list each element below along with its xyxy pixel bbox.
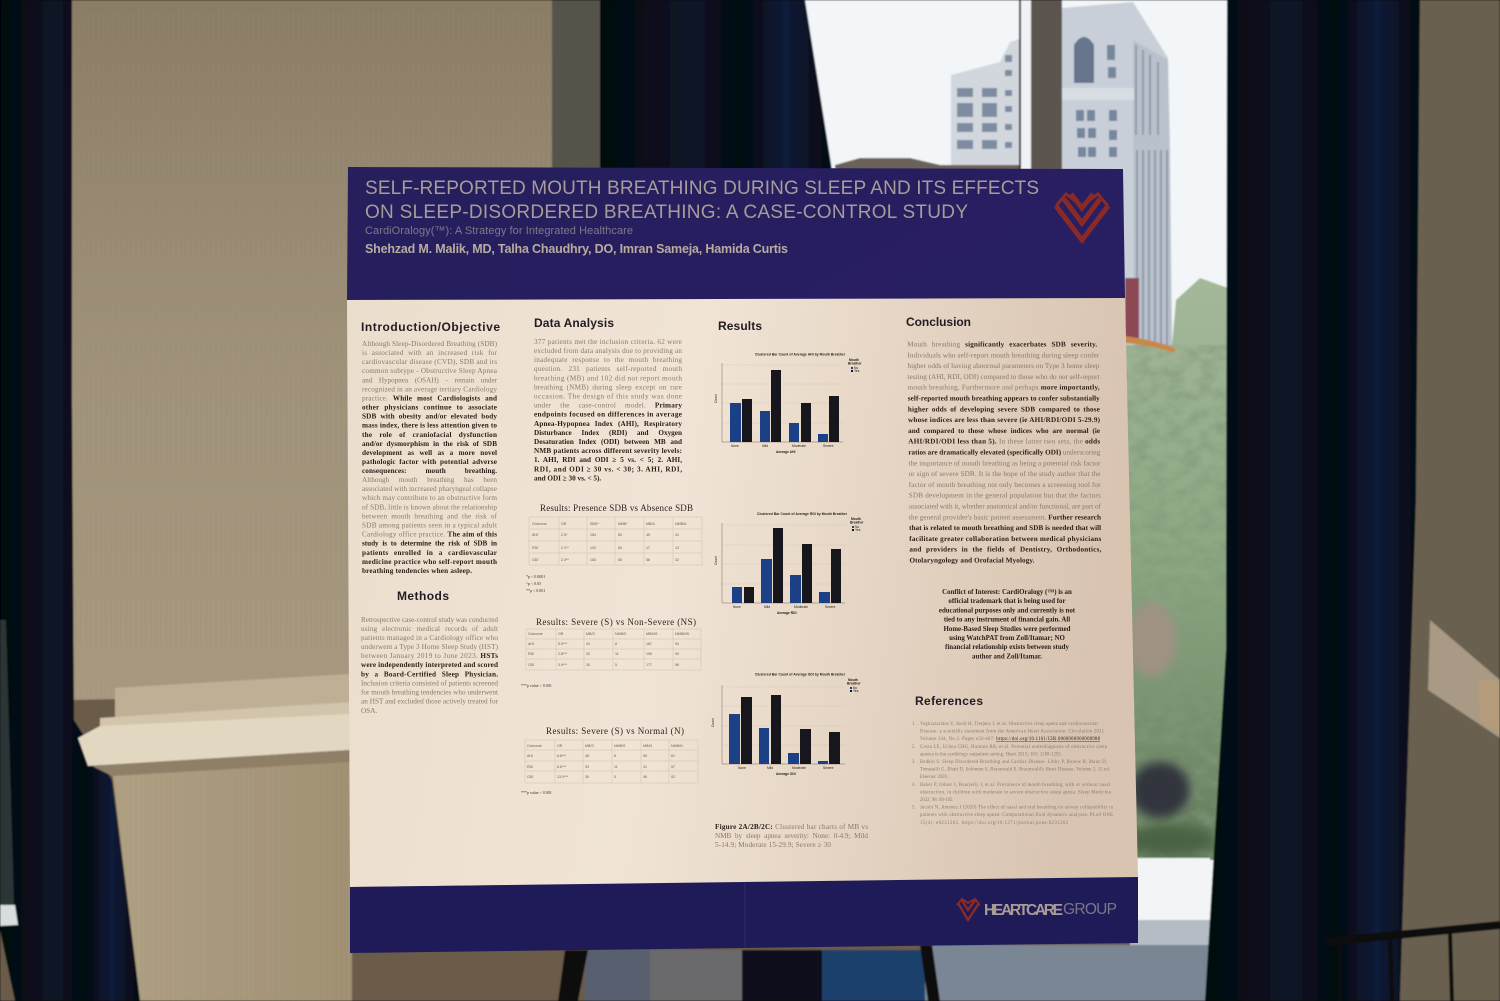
text: data analysis: Desaturation Index (ODI) between MB and	[534, 438, 682, 446]
authors: Shehzad M. Malik, MD, Talha Chaudhry, DO, Imran Sameja, Hamida Curtis	[365, 242, 788, 256]
text: conflict of interest: tied to any instrument of financial gain. All	[944, 617, 1070, 624]
window sill and lower wall	[1130, 858, 1210, 922]
table: severe vs non-severe: MB/NS	[646, 632, 658, 636]
heading: Data Analysis: Data Analysis	[534, 316, 614, 330]
table: presence vs absence SDB: OR	[561, 522, 567, 526]
table: severe vs non-severe: 90	[675, 652, 679, 656]
text: conclusion: higher odds of having abnormal parameters on Type 3 home sleep	[907, 362, 1100, 370]
table: severe vs normal: 31	[643, 765, 647, 769]
table: severe vs non-severe	[521, 617, 701, 688]
table: presence vs absence SDB: ^p < 0.05	[526, 581, 541, 586]
text: introduction: Cardiology office practice. The aim of this	[362, 530, 497, 538]
text: conclusion: self-reported mouth breathing appears to confer substantially	[908, 395, 1100, 402]
text: data analysis: 377 patients met the inclusion criteria. 62 were	[534, 338, 682, 346]
table: severe vs non-severe: 30	[586, 663, 590, 667]
right curtain	[1205, 0, 1420, 1001]
text: conflict of interest: educational purposes only and currently is not	[939, 607, 1076, 614]
text: references: 5.	[912, 806, 916, 811]
text: methods: an HST and excluded those actively treated for	[361, 698, 499, 706]
text: references: 4.	[912, 783, 916, 788]
table: presence vs absence SDB: 192	[590, 546, 596, 550]
text: references: Jacobi N, Jimenez J (2020) The effect of nasal and oral breathing on airway collapsibility in	[920, 806, 1114, 811]
figure caption: Figure 2A/2B/2C: Clustered bar charts of MB vs	[715, 823, 868, 831]
table: presence vs absence SDB: NMB/A	[675, 522, 687, 526]
text: introduction: study is to determine the risk of SDB in	[362, 540, 497, 548]
text: conclusion: the general provider's basic patient assessment. Further research	[909, 513, 1101, 521]
chart: AHI clustered bars: Mild	[762, 444, 768, 448]
table: severe vs non-severe: Outcome	[528, 632, 543, 636]
text: introduction: consequences: mouth breathing.	[362, 467, 497, 475]
table: presence vs absence SDB: SBD*	[590, 522, 599, 526]
table: severe vs normal: 8	[614, 754, 616, 758]
chart: AHI clustered bars: Breather	[848, 362, 862, 366]
table: severe vs normal	[521, 726, 698, 795]
chart: AHI clustered bars	[714, 352, 862, 454]
text: conclusion: or sign of severe SDB. It is the hope of the study author that the	[909, 470, 1101, 478]
text: methods: patients managed in a Cardiology office who	[361, 634, 498, 642]
chart: AHI clustered bars: Count	[714, 394, 718, 403]
text: references: Bedkin S. Sleep Disordered Breathing and Cardiac Disease. Libby P, Bonow R, Mann D,	[920, 760, 1107, 765]
table: severe vs non-severe: ***p value < 0.001	[521, 683, 552, 688]
heading: References: References	[915, 694, 983, 708]
text: conclusion	[907, 341, 1102, 564]
table: severe vs normal: AHI	[527, 754, 533, 758]
text: methods: using electronic medical records of adult	[361, 625, 498, 633]
trees	[1124, 278, 1228, 860]
chart: RDI clustered bars: Severe	[825, 605, 836, 609]
chart: RDI clustered bars: Yes	[855, 528, 861, 532]
text: conclusion: and providers in the fields of Dentistry, Orthodontics,	[909, 546, 1102, 554]
under poster: curtain and easel	[585, 950, 650, 1001]
chart: RDI clustered bars: Breather	[850, 520, 864, 524]
text: references: Disease: a scientific statement from the American Heart Association. Circulation 2021	[920, 730, 1105, 735]
figure caption: 5-14.9; Moderate 15-29.9; Severe ≥ 30	[715, 841, 831, 849]
text: introduction	[362, 340, 498, 575]
table: severe vs normal: NMB/N	[671, 744, 683, 748]
table: severe vs normal: OR	[557, 744, 563, 748]
text: introduction: and/or dysmorphism in the risk of SDB	[362, 440, 497, 448]
text: introduction: practice. While most Cardiologists and	[362, 394, 497, 402]
table: presence vs absence SDB: 58	[646, 558, 650, 562]
chart: RDI clustered bars: None	[733, 605, 741, 609]
table: severe vs normal: 57	[671, 765, 675, 769]
text: methods: between January 2019 to June 2023. HSTs	[361, 652, 498, 660]
text: conclusion: Individuals who self-report mouth breathing during sleep confer	[907, 351, 1100, 359]
text: data analysis: under the case-control model. Primary	[534, 402, 682, 410]
table: severe vs normal: NMB/S	[614, 744, 626, 748]
centre curtain	[600, 0, 832, 170]
text: introduction: patients enrolled in a cardiovascular	[362, 549, 498, 557]
text: data analysis: breathing (MB) and 102 did not report mouth	[534, 374, 682, 382]
chair rail moulding	[78, 674, 350, 776]
heading: Results: Results	[718, 319, 762, 333]
table: presence vs absence SDB: 184	[590, 533, 596, 537]
chart: AHI clustered bars: Moderate	[792, 444, 806, 448]
text: references: 3.	[912, 760, 916, 765]
text: data analysis: excluded from data analysis due to providing an	[534, 347, 682, 355]
heading: Methods: Methods	[397, 589, 449, 603]
text: methods: for mouth breathing tendencies who underwent	[361, 688, 498, 696]
table: presence vs absence SDB: *p < 0.0001	[526, 574, 545, 579]
footer banner	[350, 877, 1138, 953]
text: data analysis: NMB patients across different severity levels:	[534, 447, 682, 455]
text: methods	[361, 616, 499, 715]
building: distant block	[835, 38, 1022, 175]
table: severe vs normal: 50	[643, 754, 647, 758]
text: introduction: which may contribute to an obstructive form	[362, 494, 497, 502]
table: presence vs absence SDB: 41	[675, 533, 679, 537]
table: severe vs non-severe: 2.8***	[558, 652, 568, 656]
text: introduction: Although Sleep-Disordered Breathing (SDB)	[362, 340, 498, 348]
table: severe vs non-severe: 177	[646, 663, 652, 667]
table: presence vs absence SDB: 80	[618, 533, 622, 537]
table: severe vs normal: MB/S	[585, 744, 594, 748]
table: presence vs absence SDB: RDI	[532, 546, 538, 550]
chart: ODI clustered bars: Average ODI	[776, 772, 796, 776]
text: conflict of interest: author and Zoll/Itamar.	[972, 653, 1042, 660]
text: data analysis: breathing (NMB) during sleep except on rare	[534, 384, 682, 392]
table: severe vs non-severe: NMB/NS	[675, 632, 690, 636]
chart: ODI clustered bars: No	[853, 686, 857, 690]
text: data analysis: RDI, and ODI ≥ 30 vs. < 30; 3. AHI, RDI,	[534, 466, 682, 474]
text: introduction: development as well as a more novel	[362, 449, 497, 457]
text: conclusion: facilitate greater collaboration between medical physicians	[909, 535, 1101, 543]
heading: Introduction/Objective: Introduction/Objective	[361, 320, 500, 334]
table: severe vs non-severe: MB/S	[586, 632, 595, 636]
chart: RDI clustered bars: Mouth	[851, 517, 861, 521]
table: presence vs absence SDB: 84	[618, 546, 622, 550]
building: main tower	[1062, 2, 1172, 345]
table: severe vs normal: RDI	[527, 765, 533, 769]
table: presence vs absence SDB: MB/A	[646, 522, 655, 526]
table: severe vs normal: ODI	[527, 775, 533, 779]
logo: footer heartcare group: HEARTCARE	[984, 902, 1063, 919]
table: severe vs normal: 48	[585, 754, 589, 758]
table: severe vs normal: 11	[614, 765, 618, 769]
poster body panel	[347, 297, 1138, 887]
chart: AHI clustered bars: Severe	[823, 444, 834, 448]
table: severe vs non-severe: 96	[675, 663, 679, 667]
chart: ODI clustered bars: Mouth	[848, 678, 858, 682]
chart: AHI clustered bars: No	[854, 366, 858, 370]
text: data analysis	[534, 338, 682, 482]
text: conclusion: ratios are dramatically elevated (specifically ODI) underscoring	[908, 449, 1101, 456]
table: severe vs non-severe: NMB/S	[615, 632, 627, 636]
text: data analysis: endpoints focused on differences in average	[534, 410, 682, 418]
table: presence vs absence SDB	[526, 503, 702, 593]
text: references: Costa LE, Uchoa CHG, Harmon RR, et al. Potential underdiagnosis of obstructive sleep	[920, 745, 1108, 750]
table: severe vs non-severe: Results: Severe (S) vs Non-Severe (NS)	[536, 617, 696, 627]
chart: AHI clustered bars: Mouth	[849, 358, 859, 362]
table: severe vs non-severe: ODI	[528, 663, 534, 667]
chair in corner	[1325, 925, 1500, 942]
chart: ODI clustered bars: Clustered Bar Count of Average ODI by Mouth Breather	[755, 672, 846, 676]
table: severe vs normal: 30	[585, 775, 589, 779]
table: severe vs non-severe: 5.9***	[558, 642, 568, 646]
table: severe vs normal: MB/N	[643, 744, 652, 748]
text: references: 1.	[912, 722, 916, 727]
chart: ODI clustered bars: Yes	[853, 689, 859, 693]
chart: RDI clustered bars: No	[855, 525, 859, 529]
text: references	[912, 722, 1114, 826]
chart: RDI clustered bars: Clustered Bar Count of Average RDI by Mouth Breather	[757, 512, 848, 516]
text: methods: were independently interpreted and scored	[361, 661, 498, 669]
chart: AHI clustered bars: Yes	[854, 369, 860, 373]
text: conclusion: that is related to mouth breathing and SDB is needed that will	[909, 524, 1101, 532]
text: introduction: common subtype - Obstructive Sleep Apnea	[362, 367, 498, 375]
table: presence vs absence SDB: 183	[590, 558, 596, 562]
text: data analysis: occasion. The design of this study was done	[534, 392, 682, 400]
left window strip	[0, 620, 14, 905]
poster	[347, 167, 1138, 953]
logo: footer heartcare group	[957, 899, 1117, 920]
table: severe vs non-severe: RDI	[528, 652, 534, 656]
table: presence vs absence SDB: **p < 0.001	[526, 588, 545, 593]
text: introduction: recognized in an average tertiary Cardiology	[362, 386, 497, 394]
header banner	[347, 167, 1125, 300]
table: severe vs normal: 46	[643, 775, 647, 779]
table: presence vs absence SDB: 45	[646, 533, 650, 537]
text: conflict of interest: Conflict of Interest: CardiOralogy (™) is an	[942, 589, 1072, 596]
table: presence vs absence SDB: 17	[646, 546, 650, 550]
text: conclusion: testing (AHI, RDI, ODI) compared to those who do not self-report	[908, 373, 1100, 381]
text: conclusion: mouth breathing. Furthermore and perhaps more importantly,	[908, 384, 1100, 392]
text: references: Elsevier. 2020.	[920, 775, 948, 780]
text: introduction: is associated with an increased risk for	[362, 349, 498, 357]
text: introduction: medicine practice who self-report mouth	[362, 558, 497, 566]
table: severe vs normal: 33	[585, 765, 589, 769]
text: conflict of interest: official trademark that is being used for	[948, 598, 1066, 605]
text: references: Baker P, Oduor J, Bourjeily J, et al. Prevalence of mouth breathing, with or without nasal	[920, 783, 1111, 788]
poster text and charts	[361, 178, 1117, 920]
text: conclusion: Mouth breathing significantly exacerbates SDB severity.	[907, 341, 1097, 348]
chart: ODI clustered bars	[711, 672, 861, 776]
text: introduction: the role of craniofacial dysfunction	[362, 431, 497, 439]
logo: footer heartcare group: GROUP	[1063, 901, 1117, 918]
chart: RDI clustered bars: Count	[714, 556, 718, 565]
text: conclusion: the importance of mouth breathing as being a potential risk factor	[908, 459, 1101, 467]
logo: header heart	[1056, 194, 1108, 240]
left wall	[72, 0, 552, 700]
text: introduction: associated with increased pharyngeal collapse	[362, 485, 497, 493]
text: introduction: pathologic factor with potential adverse	[362, 458, 497, 466]
text: introduction: mass index, there is less attention given to	[362, 422, 497, 430]
table: severe vs normal: 61	[671, 754, 675, 758]
chart: RDI clustered bars	[714, 512, 864, 615]
text: conflict of interest: Home-Based Sleep Studies were performed	[944, 626, 1071, 633]
text: conclusion: and compared to those whose indices who are normal (ie	[908, 427, 1100, 435]
text: conclusion: Otolaryngology and Orofacial Myology.	[909, 557, 1035, 564]
text: conclusion: SDB development in the general population but that the factors	[909, 492, 1101, 500]
text: introduction: breathing tendencies when asleep.	[362, 567, 472, 575]
table: severe vs non-severe: 44	[586, 642, 590, 646]
text: methods: Inclusion criteria consisted of patients screened	[361, 680, 498, 688]
table: severe vs normal: ***p value < 0.001	[521, 790, 552, 795]
text: methods: underwent a Type 3 Home Sleep Study (HST)	[361, 643, 499, 651]
heading: Conclusion: Conclusion	[906, 315, 971, 329]
text: conflict of interest: financial relationship exists between study	[945, 644, 1070, 651]
text: introduction: between mouth breathing and the risk of	[362, 512, 498, 520]
chart: ODI clustered bars: Count	[711, 718, 715, 727]
text: introduction: Although mouth breathing has been	[362, 476, 497, 484]
text: methods: Retrospective case-control study was conducted	[361, 616, 498, 624]
table: severe vs non-severe: 187	[646, 642, 652, 646]
table: severe vs non-severe: 8	[615, 642, 617, 646]
chart: ODI clustered bars: None	[738, 766, 746, 770]
table: severe vs non-severe: 196	[646, 652, 652, 656]
text: references: Tomaselli G, Bhatt D, Solomon S, Braunwald E. Braunwald's Heart Disease. Volume 2, 12 ed.	[920, 768, 1110, 773]
text: data analysis: inadequate response to the mouth breathing	[534, 356, 682, 364]
table: severe vs non-severe: OR	[558, 632, 564, 636]
text: references: Volume 144, No.3. Pages e56-e67. https://doi.org/10.1161/CIR.0000000000000988	[920, 737, 1101, 742]
table: presence vs absence SDB: 2.5*	[561, 533, 568, 537]
table: presence vs absence SDB: AHI	[532, 533, 538, 537]
chart: RDI clustered bars: Average RDI	[777, 611, 797, 615]
text: methods: OSA.	[361, 707, 377, 715]
table: severe vs normal: 6.6***	[557, 765, 567, 769]
text: data analysis: question. 231 patients self-reported mouth	[534, 365, 682, 373]
text: introduction: cardiovascular disease (CVD), SDB and its	[362, 358, 497, 366]
text: references: apnoea in the cardiology outpatient setting. Heart 2015; 101: 1288-1292.	[920, 752, 1062, 757]
table: presence vs absence SDB: NMB*	[618, 522, 628, 526]
table: presence vs absence SDB: 80	[618, 558, 622, 562]
window mullion	[1020, 0, 1032, 170]
figure caption	[715, 823, 868, 849]
chart: AHI clustered bars: None	[731, 444, 739, 448]
table: severe vs non-severe: 3.9***	[558, 663, 568, 667]
title	[365, 178, 1039, 223]
text: data analysis: Apnea-Hypopnea Index (AHI), Respiratory	[534, 420, 682, 428]
text: data analysis: and ODI ≥ 30 vs. < 5).	[534, 474, 601, 482]
table: severe vs normal: Results: Severe (S) vs Normal (N)	[546, 726, 684, 736]
text: introduction: of SDB, little is known about the relationship	[362, 504, 497, 512]
text: references: patients with obstructive sleep apnea: Computational fluid dynamics analyses. PLoS ONE	[920, 813, 1113, 818]
table: severe vs normal: 5	[614, 775, 616, 779]
chart: ODI clustered bars: Mild	[767, 766, 773, 770]
table: presence vs absence SDB: Results: Presence SDB vs Absence SDB	[540, 503, 693, 513]
chart: RDI clustered bars: Moderate	[794, 605, 808, 609]
table: severe vs non-severe: 33	[586, 652, 590, 656]
text: references: 15(4): e0231262. https://doi.org/10.1371/journal.pone.0231262	[920, 821, 1069, 826]
title: SELF-REPORTED MOUTH BREATHING DURING SLEEP AND ITS EFFECTS	[365, 178, 1039, 199]
chart: ODI clustered bars: Severe	[823, 766, 834, 770]
chart: ODI clustered bars: Moderate	[792, 766, 806, 770]
text: references: Yeghiazarians Y, Jneid H, Tietjens J, et al. Obstructive sleep apnea and cardiovascular	[920, 722, 1098, 727]
table: severe vs normal: 13.0***	[557, 775, 569, 779]
figure caption: NMB by sleep apnea severity: None: 0-4.9; Mild	[715, 832, 868, 840]
table: presence vs absence SDB: ODI	[532, 558, 538, 562]
sky through window	[800, 0, 1230, 930]
table: presence vs absence SDB: Outcome	[532, 522, 547, 526]
text: conclusion: whose indices are less than severe (ie AHI/RDI/ODI 5-29.9)	[908, 416, 1101, 424]
table: severe vs non-severe: 5	[615, 663, 617, 667]
text: data analysis: 1. AHI, RDI and ODI ≥ 5 vs. < 5; 2. AHI,	[534, 456, 682, 464]
text: methods: by a Board-Certified Sleep Physician.	[361, 670, 498, 678]
text: introduction: SDB among patients seen in a typical adult	[362, 522, 497, 530]
text: references: obstruction, in children with moderate to severe obstructive sleep apnea. Sleep Medicine	[920, 790, 1111, 795]
table: severe vs non-severe: 11	[615, 652, 619, 656]
text: introduction: other physicians continue to associate	[362, 404, 497, 412]
right wall	[1400, 0, 1500, 1001]
text: conclusion: associated with it, whether anatomical and/or functional, are part of	[909, 503, 1102, 510]
text: conflict of interest	[939, 589, 1076, 660]
title: ON SLEEP-DISORDERED BREATHING: A CASE-CONTROL STUDY	[365, 202, 968, 223]
chart: AHI clustered bars: Clustered Bar Count of Average AHI by Mouth Breather	[755, 352, 846, 356]
chart: ODI clustered bars: Breather	[847, 682, 861, 686]
text: conflict of interest: using WatchPAT from Zoll/Itamar; NO	[949, 635, 1066, 642]
table: presence vs absence SDB: 32	[675, 558, 679, 562]
table: presence vs absence SDB: 13	[675, 546, 679, 550]
table: severe vs non-severe: 94	[675, 642, 679, 646]
chart: AHI clustered bars: Average AHI	[776, 450, 795, 454]
subtitle: CardiOralogy(™): A Strategy for Integrated Healthcare	[365, 225, 633, 237]
table: severe vs normal: 92	[671, 775, 675, 779]
text: conclusion: AHI/RDI/ODI less than 5). In these latter two sets, the odds	[908, 438, 1100, 446]
table: severe vs normal: 6.8***	[557, 754, 567, 758]
text: conclusion: factor of mouth breathing not only becomes a screening tool for	[909, 481, 1101, 489]
text: references: 2.	[912, 745, 916, 750]
marquee sign	[1125, 278, 1139, 343]
table: presence vs absence SDB: 2.3**	[561, 558, 569, 562]
text: references: 2022; 98: 98-105.	[920, 798, 953, 803]
table: severe vs non-severe: AHI	[528, 642, 534, 646]
text: introduction: SDB with obesity and/or elevated body	[362, 412, 497, 420]
table: presence vs absence SDB: 2.1**	[561, 546, 569, 550]
chart: RDI clustered bars: Mild	[764, 605, 770, 609]
table: severe vs normal: Outcome	[527, 744, 542, 748]
left curtain	[0, 0, 140, 1001]
text: introduction: and Hypopnea (OSAH) - remain under	[362, 376, 498, 384]
text: data analysis: Disturbance Index (RDI) and Oxygen	[534, 429, 682, 437]
text: conclusion: higher odds of developing severe SDB compared to those	[908, 405, 1100, 413]
